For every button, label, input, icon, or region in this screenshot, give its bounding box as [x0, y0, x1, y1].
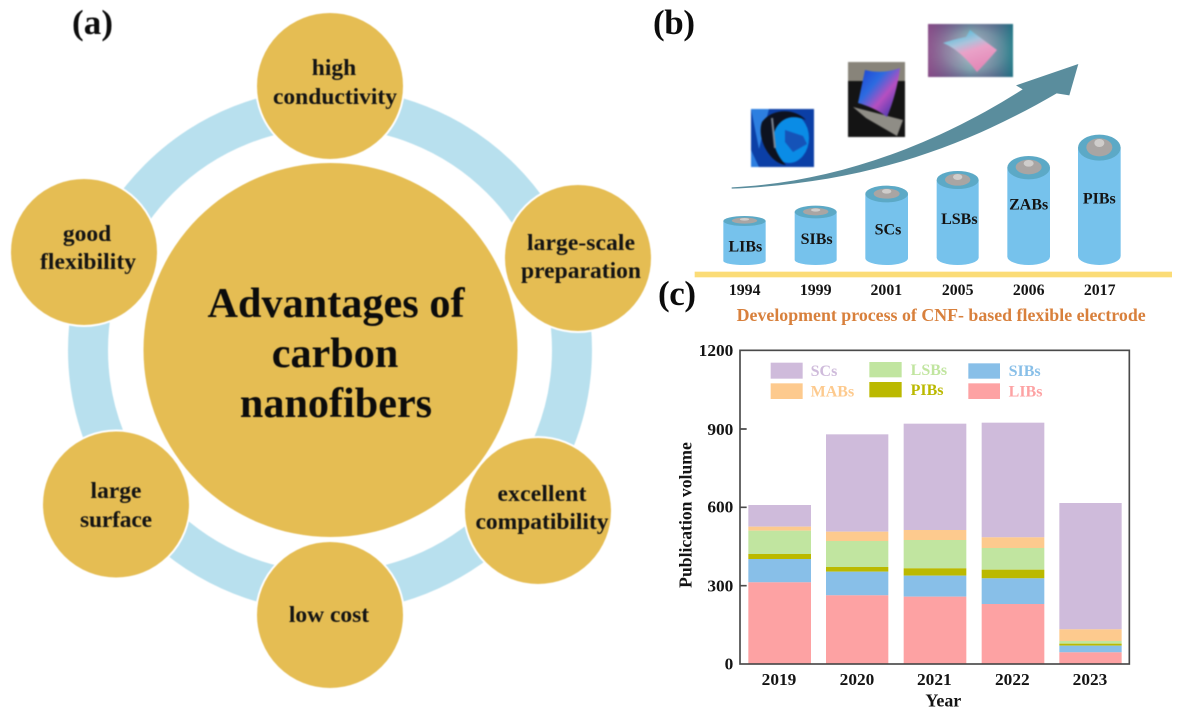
growth arrow: [732, 64, 1078, 189]
timeline bar: [695, 272, 1172, 277]
chart frame and ticks: [740, 350, 1129, 664]
chart: 2019 stack: [748, 505, 811, 664]
central circle: carbon: [272, 330, 398, 377]
x-axis tick labels: 2022: [995, 670, 1030, 689]
node: large surface: surface: [80, 507, 152, 533]
panel c: stacked bar chart of publication volume: [676, 341, 1129, 711]
node: good flexibility: flexibility: [40, 249, 136, 275]
cylinder LIBs: [723, 216, 766, 265]
cylinder PIBs: [1078, 135, 1121, 265]
chart: 2020 stack: [826, 434, 888, 664]
central circle: Advantages of: [208, 280, 465, 327]
photo: flexible wristband: [751, 109, 814, 167]
legend: LIBs: [1009, 384, 1042, 401]
y-axis tick labels: 0: [725, 654, 733, 673]
chart: 2022 stack: [982, 423, 1044, 664]
timeline years: [729, 282, 1116, 299]
node: excellent compatibility: excellent: [498, 481, 587, 507]
node: excellent compatibility: compatibility: [476, 509, 609, 535]
node: low cost: low cost: [289, 602, 369, 628]
legend: LSBs: [911, 362, 947, 379]
timeline years: 2001: [871, 282, 902, 299]
timeline years: 1994: [729, 282, 761, 299]
legend: PIBs: [911, 382, 944, 399]
node: excellent compatibility: [464, 437, 612, 585]
legend: SCs: [811, 363, 837, 380]
node: high conductivity: conductivity: [273, 84, 397, 110]
chart: 2021 stack: [904, 424, 966, 664]
node: large-scale preparation: preparation: [521, 258, 641, 284]
timeline caption: Development process of CNF- based flexible electrode: [737, 305, 1146, 325]
timeline years: 1999: [800, 282, 832, 299]
connecting ring: [88, 108, 572, 592]
cylinder ZABs: [1007, 156, 1050, 265]
node: large surface: large: [91, 478, 141, 504]
node: good flexibility: good: [63, 221, 111, 247]
x-axis tick labels: 2019: [762, 670, 797, 689]
y-axis tick labels: 600: [707, 498, 733, 517]
node: low cost: [256, 541, 404, 689]
cylinder SIBs: [795, 206, 837, 265]
node: large surface: [42, 430, 190, 578]
cylinder LIBs: LIBs: [728, 239, 762, 256]
timeline years: 2005: [942, 282, 974, 299]
y-axis title: Publication volume: [676, 442, 696, 588]
legend: [771, 362, 1042, 401]
y-axis tick labels: [699, 341, 733, 673]
panel b: development timeline: [695, 64, 1172, 325]
cylinder ZABs: ZABs: [1009, 196, 1048, 213]
node: high conductivity: high: [312, 55, 356, 81]
cylinder SIBs: SIBs: [801, 231, 833, 248]
panel label (a): (a): [72, 3, 113, 42]
x-axis title: Year: [925, 691, 961, 711]
node: high conductivity: [256, 12, 404, 160]
cylinder SCs: [865, 186, 908, 265]
node: large-scale preparation: [504, 184, 652, 332]
timeline years: 2006: [1013, 282, 1045, 299]
cylinder PIBs: PIBs: [1083, 190, 1116, 207]
node: good flexibility: [10, 178, 158, 326]
x-axis tick labels: 2020: [840, 670, 874, 689]
cylinder LSBs: LSBs: [941, 211, 978, 228]
cylinder SCs: SCs: [875, 221, 901, 238]
photo: folding phone: [928, 24, 1013, 77]
y-axis tick labels: 900: [707, 420, 733, 439]
timeline years: 2017: [1084, 282, 1116, 299]
legend: MABs: [811, 384, 854, 401]
central circle: [144, 163, 518, 537]
x-axis tick labels: [762, 670, 1108, 689]
panel label (c): (c): [658, 274, 696, 313]
node: large-scale preparation: large-scale: [527, 230, 635, 256]
y-axis tick labels: 1200: [699, 341, 733, 360]
chart: 2023 stack: [1059, 503, 1122, 664]
panel label (b): (b): [653, 3, 695, 42]
x-axis tick labels: 2021: [917, 670, 952, 689]
x-axis tick labels: 2023: [1073, 670, 1108, 689]
y-axis tick labels: 300: [707, 577, 733, 596]
legend: SIBs: [1009, 363, 1041, 380]
photo: curved display: [848, 62, 905, 137]
cylinder LSBs: [937, 171, 979, 265]
panel a: advantages of carbon nanofibers: [10, 3, 652, 689]
central circle: nanofibers: [240, 380, 432, 427]
